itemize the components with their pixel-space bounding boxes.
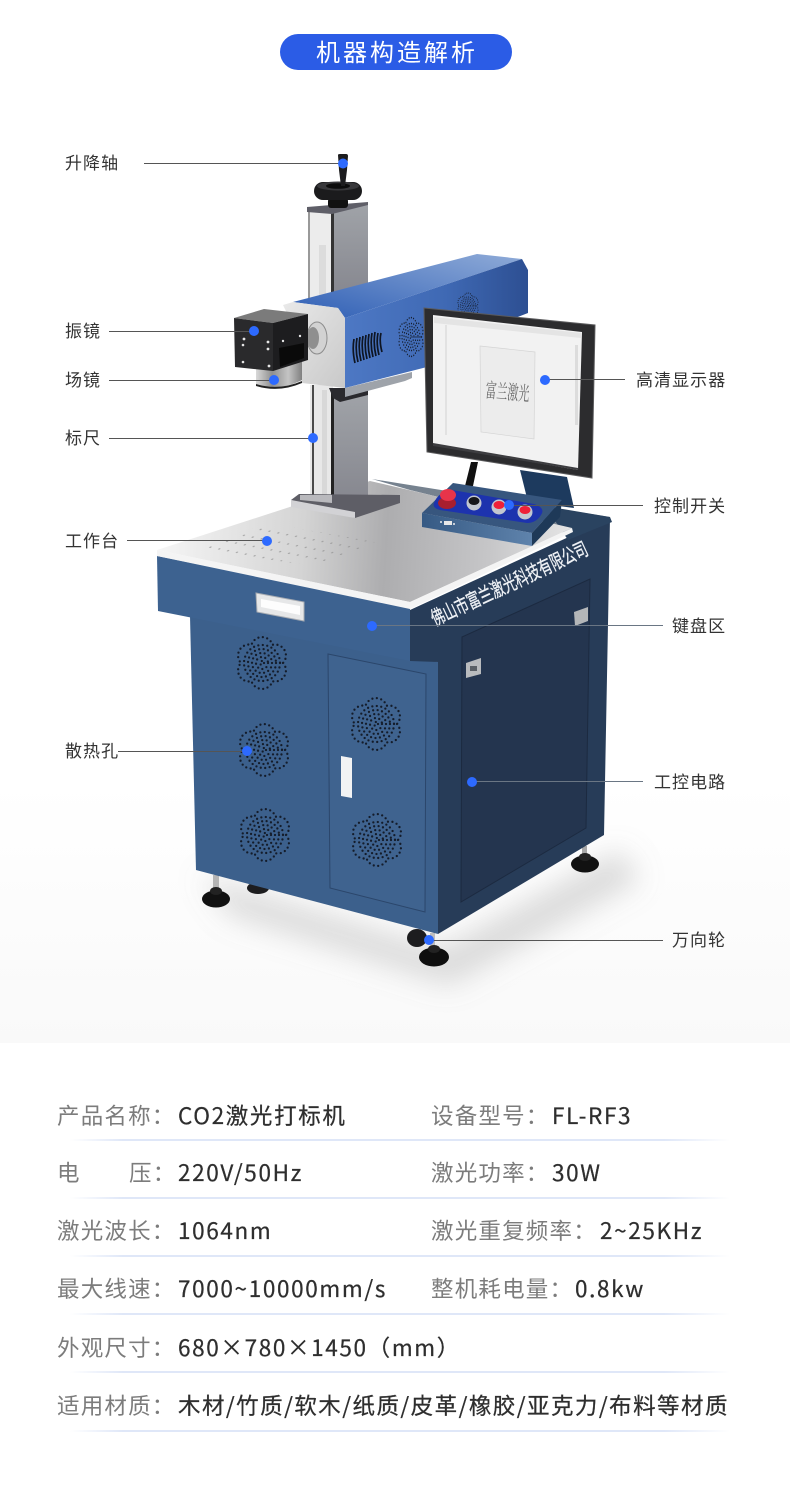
callout: 万向轮 [424, 926, 726, 951]
spec row: 最大线速 / 整机耗电量: 7000~10000mm/s [178, 1272, 387, 1304]
arm top face [293, 254, 522, 318]
callout: 工控电路: 工控电路 [654, 768, 726, 793]
callout: 标尺: 标尺 [65, 424, 101, 449]
keyboard drawer panel [157, 556, 410, 661]
callout: 键盘区: 键盘区 [672, 612, 726, 637]
spec row: 产品名称 / 设备型号: FL-RF3 [552, 1099, 632, 1131]
column upper [308, 210, 332, 300]
door handle [341, 756, 352, 798]
spec row: 电压 / 激光功率: 激光功率： [431, 1156, 550, 1188]
foot: front caster [407, 929, 427, 947]
spec row: 最大线速 / 整机耗电量: 最大线速： [57, 1272, 176, 1304]
arm silver end [283, 302, 345, 388]
callout: 升降轴: 升降轴 [65, 149, 119, 174]
spec row: 产品名称 / 设备型号 [57, 1099, 632, 1131]
arm air slots [353, 332, 382, 363]
spec row: 激光波长 / 激光重复频率: 1064nm [178, 1214, 272, 1246]
galvo connector [307, 322, 327, 354]
cabinet left front panel [190, 616, 438, 934]
callout: 散热孔: 散热孔 [65, 737, 119, 762]
title pill: 机器构造解析 [316, 33, 478, 68]
callout: 振镜 [65, 317, 259, 342]
monitor [424, 308, 595, 478]
spec row: 电压 / 激光功率: 压： [129, 1156, 176, 1188]
spec row: 最大线速 / 整机耗电量 [57, 1272, 645, 1304]
foot: front corner [419, 933, 449, 966]
cabinet right side panel [410, 518, 610, 934]
column base plate [291, 494, 400, 518]
callout: 高清显示器 [540, 366, 726, 391]
spec row: 外观尺寸: 外观尺寸： [57, 1331, 176, 1363]
spec row: 激光波长 / 激光重复频率: 2~25KHz [600, 1214, 703, 1246]
right door latch lower [466, 658, 481, 678]
callout: 高清显示器: 高清显示器 [636, 366, 726, 391]
callout: 升降轴 [65, 149, 348, 174]
table mounting holes [193, 523, 375, 566]
arm side face [345, 259, 528, 388]
column lower [310, 385, 333, 505]
spec row: 产品名称 / 设备型号: 设备型号： [431, 1099, 550, 1131]
callout: 万向轮: 万向轮 [672, 926, 726, 951]
spec row: 电压 / 激光功率 [57, 1156, 602, 1188]
callout: 工控电路 [467, 768, 726, 793]
cabinet [190, 518, 610, 934]
screen toolbar [434, 317, 581, 338]
design page [480, 346, 535, 439]
control box [422, 483, 562, 546]
spec row: 最大线速 / 整机耗电量: 整机耗电量： [431, 1272, 573, 1304]
arm lower bracket [345, 372, 412, 397]
callout: 工作台: 工作台 [65, 527, 119, 552]
screen logo text: 富兰激光 [484, 375, 531, 407]
spec row: 适用材质: 木材/竹质/软木/纸质/皮革/橡胶/亚克力/布料等材质 [178, 1389, 729, 1421]
monitor stand [465, 462, 574, 508]
right side door [461, 579, 590, 902]
callout: 场镜: 场镜 [65, 366, 101, 391]
control box top [422, 483, 562, 533]
field lens [256, 362, 302, 389]
spec row: 最大线速 / 整机耗电量: 0.8kw [575, 1272, 645, 1304]
red button 2 [518, 504, 532, 520]
callout: 控制开关: 控制开关 [654, 492, 726, 517]
callout: 散热孔 [65, 737, 252, 762]
spec row: 产品名称 / 设备型号: CO2激光打标机 [178, 1099, 347, 1131]
callout: 键盘区 [367, 612, 726, 637]
drawer handle [256, 593, 304, 621]
spec row: 外观尺寸: 680×780×1450（mm） [178, 1331, 461, 1363]
front door [328, 654, 426, 912]
callout: 标尺 [65, 424, 318, 449]
spec row: 激光波长 / 激光重复频率 [57, 1214, 703, 1246]
control box right [532, 500, 562, 546]
callout: 控制开关 [504, 492, 726, 517]
black button [466, 496, 482, 510]
laser arm [283, 254, 528, 397]
galvo head [234, 309, 308, 371]
callout: 工作台 [65, 527, 272, 552]
company name on cabinet: 佛山市富兰激光科技有限公司 [425, 533, 592, 631]
red button [492, 500, 506, 514]
table top [157, 479, 612, 609]
foot: front left [202, 875, 230, 908]
usb port [440, 521, 455, 525]
column top plate [307, 202, 368, 214]
button panel [434, 490, 542, 523]
foot: rear right [571, 846, 599, 872]
callout: 振镜: 振镜 [65, 317, 101, 342]
spec row: 电压 / 激光功率: 30W [552, 1156, 602, 1188]
spec row: 激光波长 / 激光重复频率: 激光波长： [57, 1214, 176, 1246]
arm vent flower rear [458, 293, 478, 319]
floor shadow [200, 850, 640, 985]
spec row: 产品名称 / 设备型号: 产品名称： [57, 1099, 176, 1131]
column [291, 202, 400, 518]
right door latch upper [574, 607, 588, 626]
callout: 场镜 [65, 366, 279, 391]
spec row: 电压 / 激光功率: 电 [57, 1156, 81, 1188]
spec row: 激光波长 / 激光重复频率: 激光重复频率： [431, 1214, 597, 1246]
spec row: 适用材质: 适用材质： [57, 1389, 176, 1421]
heat vent holes [238, 637, 401, 866]
spec row: 电压 / 激光功率: 220V/50Hz [178, 1156, 303, 1188]
monitor screen [433, 315, 582, 470]
control box front [422, 513, 532, 546]
arm vent flower [399, 318, 423, 356]
lifting handwheel [314, 154, 362, 208]
title pill [280, 34, 512, 70]
emergency stop [438, 489, 456, 509]
foot: rear caster [247, 882, 269, 894]
